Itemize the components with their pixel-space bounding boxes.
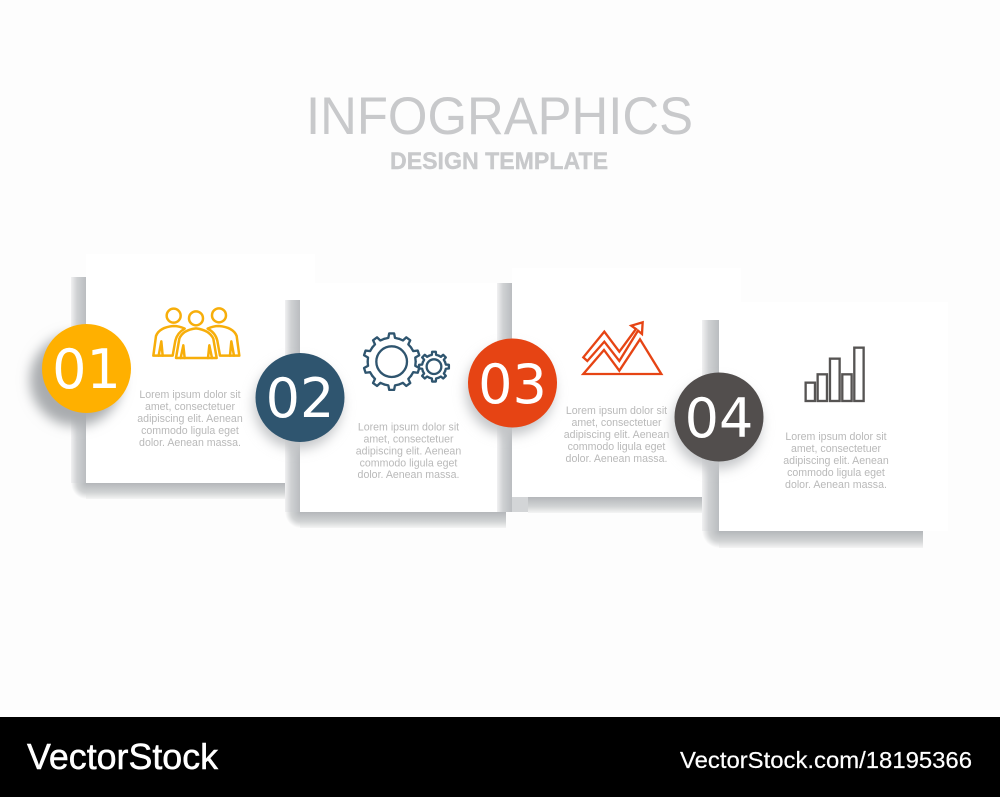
text block: commodo ligula eget [787, 467, 885, 479]
text block: dolor. Aenean massa. [566, 453, 667, 465]
text block: commodo ligula eget [360, 458, 457, 470]
icon: people [153, 308, 239, 358]
badge 04: 04 [685, 387, 753, 450]
footer url: VectorStock.com/18195366 [680, 747, 972, 773]
subtitle: DESIGN TEMPLATE [390, 148, 608, 175]
text block: commodo ligula eget [568, 441, 665, 453]
text block: Lorem ipsum dolor sit [358, 422, 459, 434]
text block: adipiscing elit. Aenean [783, 455, 889, 467]
text block [564, 405, 669, 465]
text block: adipiscing elit. Aenean [564, 429, 669, 441]
text block: adipiscing elit. Aenean [137, 413, 243, 425]
badge 01 [30, 324, 131, 426]
text block: dolor. Aenean massa. [139, 437, 241, 449]
text block: amet, consectetuer [791, 443, 882, 455]
text block: Lorem ipsum dolor sit [566, 405, 667, 417]
text block [783, 431, 889, 491]
panel: card 2 [285, 283, 512, 528]
text block: Lorem ipsum dolor sit [139, 389, 241, 401]
text block: adipiscing elit. Aenean [356, 446, 461, 458]
text block: amet, consectetuer [571, 417, 662, 429]
icon: bar chart [806, 348, 864, 401]
badge 04 [673, 372, 764, 469]
text block [356, 422, 461, 481]
badge 01: 01 [52, 338, 121, 401]
badge 03: 03 [478, 353, 547, 416]
panel: card 1 [71, 254, 315, 499]
text block [137, 389, 243, 449]
badge 03 [466, 338, 557, 435]
icon: mountain with arrow [583, 322, 661, 374]
icon: gears [363, 333, 449, 390]
title: INFOGRAPHICS [306, 87, 693, 146]
footer logo: VectorStock [27, 736, 219, 777]
text block: dolor. Aenean massa. [785, 479, 887, 491]
text block: amet, consectetuer [145, 401, 236, 413]
text block: dolor. Aenean massa. [358, 469, 459, 481]
footer bar [0, 717, 1000, 797]
text block: commodo ligula eget [141, 425, 239, 437]
text block: amet, consectetuer [363, 434, 454, 446]
badge 02 [254, 353, 344, 449]
badge 02: 02 [266, 367, 334, 430]
panel: card 4 [702, 302, 948, 548]
text block: Lorem ipsum dolor sit [785, 431, 887, 443]
panel: card 3 [497, 268, 741, 513]
